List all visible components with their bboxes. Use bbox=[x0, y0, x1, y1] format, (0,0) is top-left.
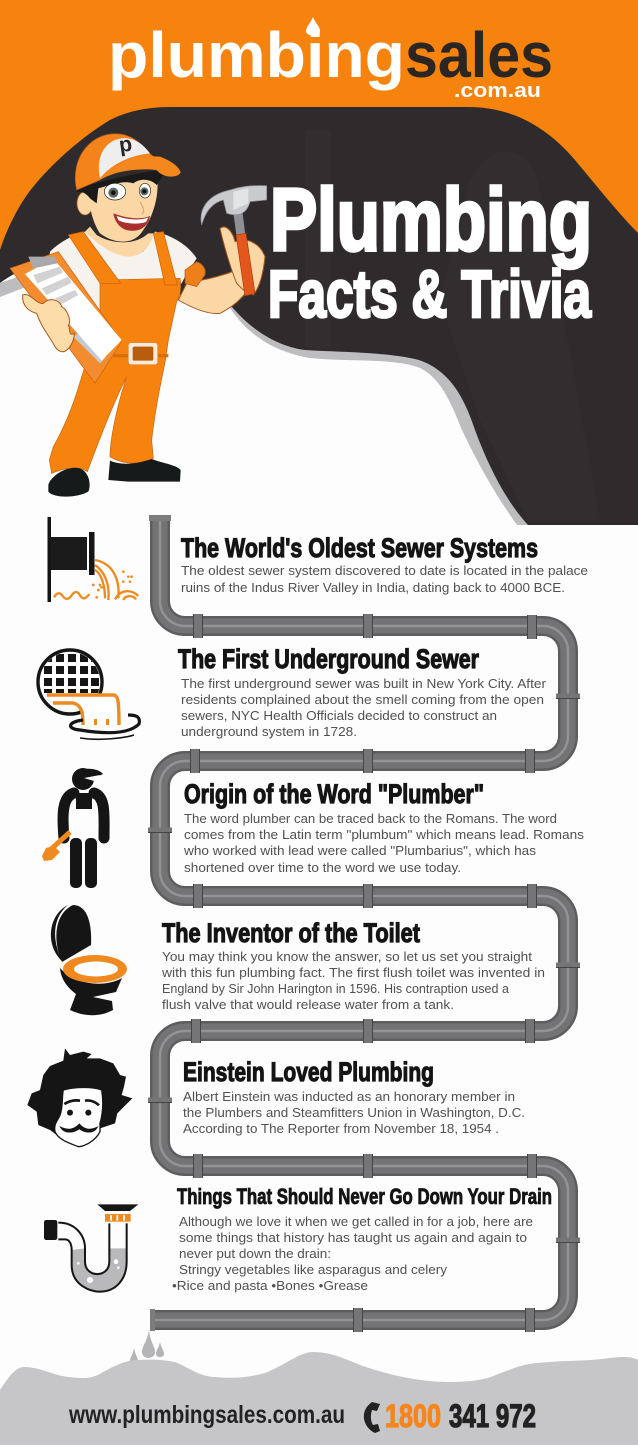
main title bbox=[268, 170, 592, 332]
heading: Origin of the Word "Plumber" bbox=[184, 779, 484, 809]
shoes bbox=[48, 459, 181, 497]
section 3 bbox=[42, 768, 585, 888]
belt and buckle bbox=[113, 343, 168, 365]
icon: drain trap bbox=[44, 1204, 138, 1292]
heading: The First Underground Sewer bbox=[178, 644, 479, 674]
sleeve bbox=[185, 262, 205, 287]
icon: plumber figure bbox=[42, 768, 104, 888]
text block bbox=[181, 563, 588, 595]
arm bbox=[178, 270, 248, 314]
text block: Albert Einstein was inducted as an honorary member in bbox=[183, 1089, 515, 1104]
banner: grey swoosh right bbox=[225, 300, 545, 525]
text block: some things that history has taught us again and again to bbox=[179, 1230, 527, 1245]
heading: The Inventor of the Toilet bbox=[162, 918, 420, 948]
text block bbox=[181, 676, 547, 739]
text block: England by Sir John Harington in 1596. His contraption used a bbox=[162, 981, 510, 996]
hat: p bbox=[117, 132, 134, 157]
text block: ruins of the Indus River Valley in India, dating back to 4000 BCE. bbox=[181, 580, 565, 595]
text block: the Plumbers and Steamfitters Union in Washington, D.C. bbox=[183, 1105, 525, 1120]
text block: According to The Reporter from November 18, 1954 . bbox=[183, 1121, 499, 1136]
icon: Einstein face bbox=[27, 1048, 132, 1147]
icon: water drips bbox=[130, 1330, 164, 1364]
text block: residents complained about the smell coming from the open bbox=[181, 692, 544, 707]
footer: grey wave bbox=[0, 1352, 638, 1445]
hand with thumb bbox=[220, 227, 265, 295]
text block: never put down the drain: bbox=[179, 1246, 331, 1261]
head bbox=[77, 170, 163, 242]
section 1 bbox=[48, 517, 588, 602]
neck bbox=[85, 227, 154, 257]
illustration: plumber mascot bbox=[10, 132, 267, 497]
icon: sewer outflow bbox=[48, 517, 138, 602]
hammer handle bbox=[236, 233, 255, 296]
logo: sales bbox=[405, 19, 553, 91]
banner: dark photo shape bbox=[0, 107, 638, 525]
header: orange band bbox=[0, 0, 638, 270]
text block: who worked with lead were called "Plumbarius", which has bbox=[183, 843, 537, 858]
hand holding clipboard bbox=[23, 294, 74, 352]
text block: Although we love it when we get called in for a job, here are bbox=[179, 1214, 533, 1229]
text block: The first underground sewer was built in New York City. After bbox=[181, 676, 547, 691]
text block: You may think you know the answer, so let us set you straight bbox=[162, 949, 532, 964]
text block: flush valve that would release water from a tank. bbox=[162, 997, 454, 1012]
text block: Stringy vegetables like asparagus and celery bbox=[179, 1262, 448, 1277]
icon: phone bbox=[364, 1402, 380, 1433]
logo bbox=[108, 17, 553, 102]
text block: with this fun plumbing fact. The first flush toilet was invented in bbox=[161, 965, 545, 980]
text block: shortened over time to the word we use today. bbox=[184, 860, 461, 875]
overalls bbox=[49, 278, 181, 473]
hammer head bbox=[201, 186, 267, 237]
banner: grey swoosh left bbox=[0, 262, 70, 297]
text block: sewers, NYC Health Officials decided to construct an bbox=[181, 708, 497, 723]
text block: The word plumber can be traced back to the Romans. The word bbox=[184, 811, 557, 826]
icon: water drop on logo bbox=[306, 17, 320, 36]
footer: website and phone: 1800 bbox=[385, 1398, 441, 1434]
text block: underground system in 1728. bbox=[181, 724, 357, 739]
heading: Einstein Loved Plumbing bbox=[183, 1057, 434, 1087]
hat bbox=[75, 132, 181, 190]
mouth bbox=[113, 213, 150, 231]
icon: manhole bbox=[38, 650, 139, 739]
text block bbox=[183, 811, 585, 875]
section 4 bbox=[51, 905, 545, 1015]
t-shirt bbox=[43, 232, 197, 313]
footer: website and phone bbox=[68, 1398, 536, 1434]
text block: comes from the Latin term "plumbum" which means lead. Romans bbox=[184, 827, 585, 842]
heading: The World's Oldest Sewer Systems bbox=[181, 533, 538, 563]
text block: •Rice and pasta •Bones •Grease bbox=[172, 1278, 368, 1293]
text block bbox=[161, 949, 545, 1012]
text block bbox=[172, 1214, 533, 1293]
pipeline bbox=[148, 515, 580, 1332]
icon: toilet bbox=[51, 905, 127, 1015]
overall straps bbox=[68, 232, 177, 285]
section 5 bbox=[27, 1048, 525, 1147]
logo: plumbing bbox=[108, 19, 405, 91]
logo: .com.au bbox=[454, 80, 541, 102]
text block: The oldest sewer system discovered to date is located in the palace bbox=[181, 563, 588, 578]
section 6 bbox=[44, 1184, 552, 1293]
section 2 bbox=[38, 644, 547, 739]
text block bbox=[183, 1089, 525, 1136]
eyes bbox=[104, 183, 126, 200]
footer: website and phone: 341 972 bbox=[449, 1398, 536, 1434]
footer: website and phone: www.plumbingsales.com.au bbox=[68, 1401, 345, 1429]
clipboard bbox=[10, 252, 122, 383]
